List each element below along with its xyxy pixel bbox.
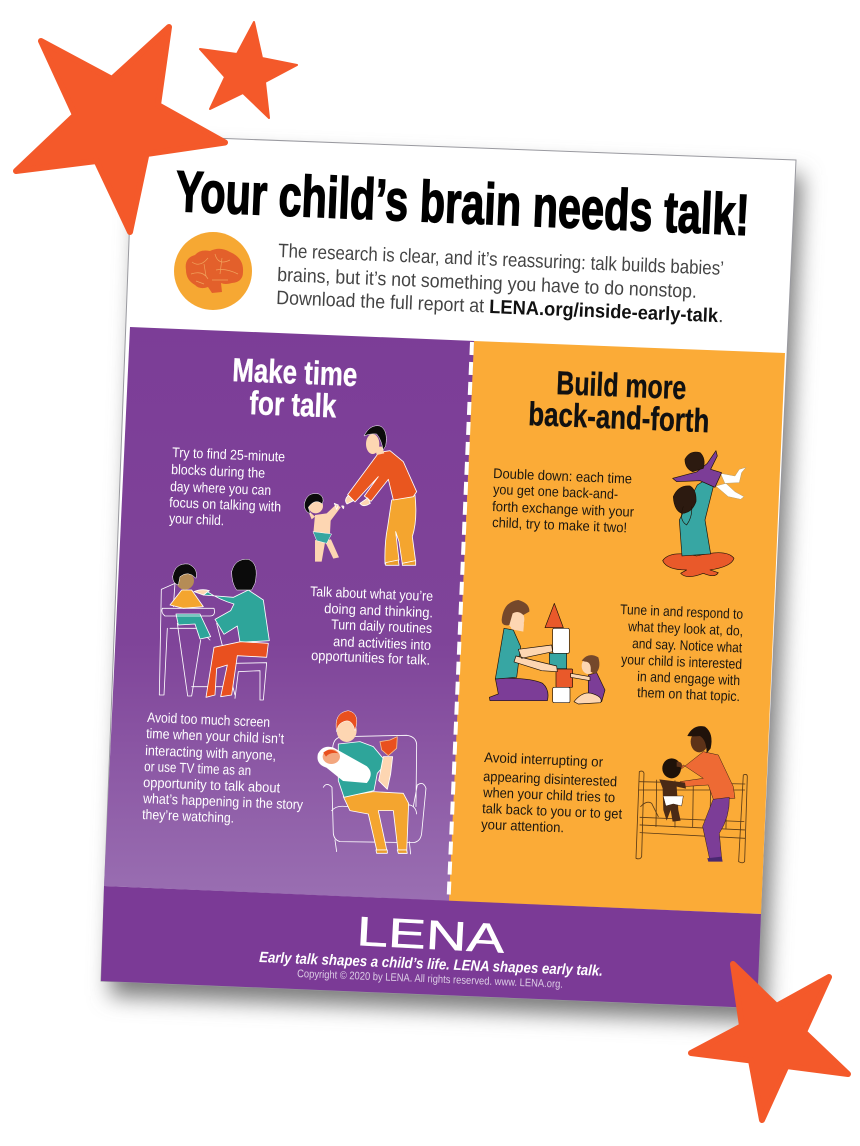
text: tune in and respond: and say. Notice what xyxy=(632,635,743,655)
text: avoid too much screen time: they’re watching. xyxy=(142,806,234,826)
heading: make time for talk xyxy=(232,351,358,425)
icon: brain xyxy=(174,232,252,310)
tagline: Early talk shapes a child’s life. LENA shapes early talk. xyxy=(259,949,603,980)
text: find 25-minute blocks: focus on talking with xyxy=(169,494,281,514)
text: double down: you get one back-and- xyxy=(493,481,619,502)
text: avoid too much screen time: or use TV time as an xyxy=(144,758,251,778)
text: avoid interrupting: Avoid interrupting or xyxy=(484,749,604,770)
text: avoid interrupting: when your child tries to xyxy=(482,784,616,805)
text: find 25-minute blocks: blocks during the xyxy=(171,461,266,481)
text: find 25-minute blocks xyxy=(169,444,286,528)
intro text: LENA.org/inside-early-talk xyxy=(489,296,719,327)
intro text: The research is clear, and it’s reassuring: talk builds babies’ xyxy=(278,240,724,280)
text: find 25-minute blocks: day where you can xyxy=(170,478,271,498)
decorative star: bottom-right xyxy=(691,964,848,1120)
text: avoid interrupting: appearing disinterested xyxy=(483,768,617,789)
text: avoid too much screen time: what’s happening in the story xyxy=(142,790,303,812)
text: avoid too much screen time: opportunity to talk about xyxy=(143,774,281,795)
logo: LENA: LENA xyxy=(356,908,507,962)
text: tune in and respond xyxy=(620,601,744,704)
illustration: parent feeding child in high chair xyxy=(159,559,269,700)
illustration: parent reading to baby in armchair xyxy=(318,711,426,854)
illustration: parent helping toddler walk xyxy=(304,426,417,565)
intro text: brains, but it’s not something you have to do nonstop. xyxy=(277,264,697,303)
decorative star: top small xyxy=(200,22,297,118)
intro text: . xyxy=(718,305,724,327)
text: talk about what you're doing: Turn daily routines xyxy=(331,616,432,636)
text: double down: Double down: each time xyxy=(493,465,633,487)
text: talk about what you're doing: Talk about what you’re xyxy=(310,583,434,604)
copyright: Copyright © 2020 by LENA. All rights reserved. www. LENA.org. xyxy=(297,968,563,991)
text: avoid too much screen time: interacting with anyone, xyxy=(145,742,276,763)
illustration: parent lifting child overhead xyxy=(663,451,746,577)
panel: make time for talk xyxy=(104,327,475,901)
heading: make time for talk: for talk xyxy=(249,384,338,425)
text: talk about what you're doing: and activities into xyxy=(333,633,432,653)
heading: build more back-and-forth: Build more xyxy=(556,364,687,406)
panel: footer band xyxy=(101,886,761,1008)
intro text: Download the full report at xyxy=(276,287,485,317)
text: talk about what you're doing: doing and thinking. xyxy=(324,600,433,620)
text: avoid too much screen time xyxy=(142,709,303,826)
decorative star: top-left large xyxy=(16,27,225,232)
heading: build more back-and-forth xyxy=(528,364,710,439)
panel: build more back-and-forth xyxy=(449,341,785,914)
text: find 25-minute blocks: Try to find 25-minute xyxy=(172,444,286,465)
illustration: parent with child in crib xyxy=(636,726,747,863)
text: avoid interrupting xyxy=(481,749,623,835)
text: double down: child, try to make it two! xyxy=(492,514,627,535)
text: avoid interrupting: your attention. xyxy=(481,816,564,835)
text: avoid too much screen time: time when your child isn’t xyxy=(146,725,285,747)
intro text xyxy=(276,240,724,327)
paper shadow xyxy=(110,150,802,1022)
heading: make time for talk: Make time xyxy=(232,351,358,393)
heading: build more back-and-forth: back-and-forth xyxy=(528,395,710,439)
text: double down: forth exchange with your xyxy=(492,498,635,520)
text: tune in and respond: them on that topic. xyxy=(637,684,740,704)
illustration: parent and child with blocks xyxy=(489,600,605,704)
paper sheet xyxy=(101,135,796,1008)
text: avoid too much screen time: Avoid too much screen xyxy=(147,709,270,730)
text: tune in and respond: in and engage with xyxy=(637,668,740,688)
text: tune in and respond: what they look at, do, xyxy=(627,618,743,639)
text: tune in and respond: Tune in and respond to xyxy=(620,601,744,622)
text: find 25-minute blocks: your child. xyxy=(169,510,224,528)
text: tune in and respond: your child is interested xyxy=(621,651,742,672)
text: talk about what you're doing: opportunities for talk. xyxy=(311,647,430,668)
dashed divider xyxy=(448,342,472,901)
text: talk about what you're doing xyxy=(310,583,434,668)
text: double down xyxy=(492,465,635,535)
text: avoid interrupting: talk back to you or to get xyxy=(482,800,623,822)
